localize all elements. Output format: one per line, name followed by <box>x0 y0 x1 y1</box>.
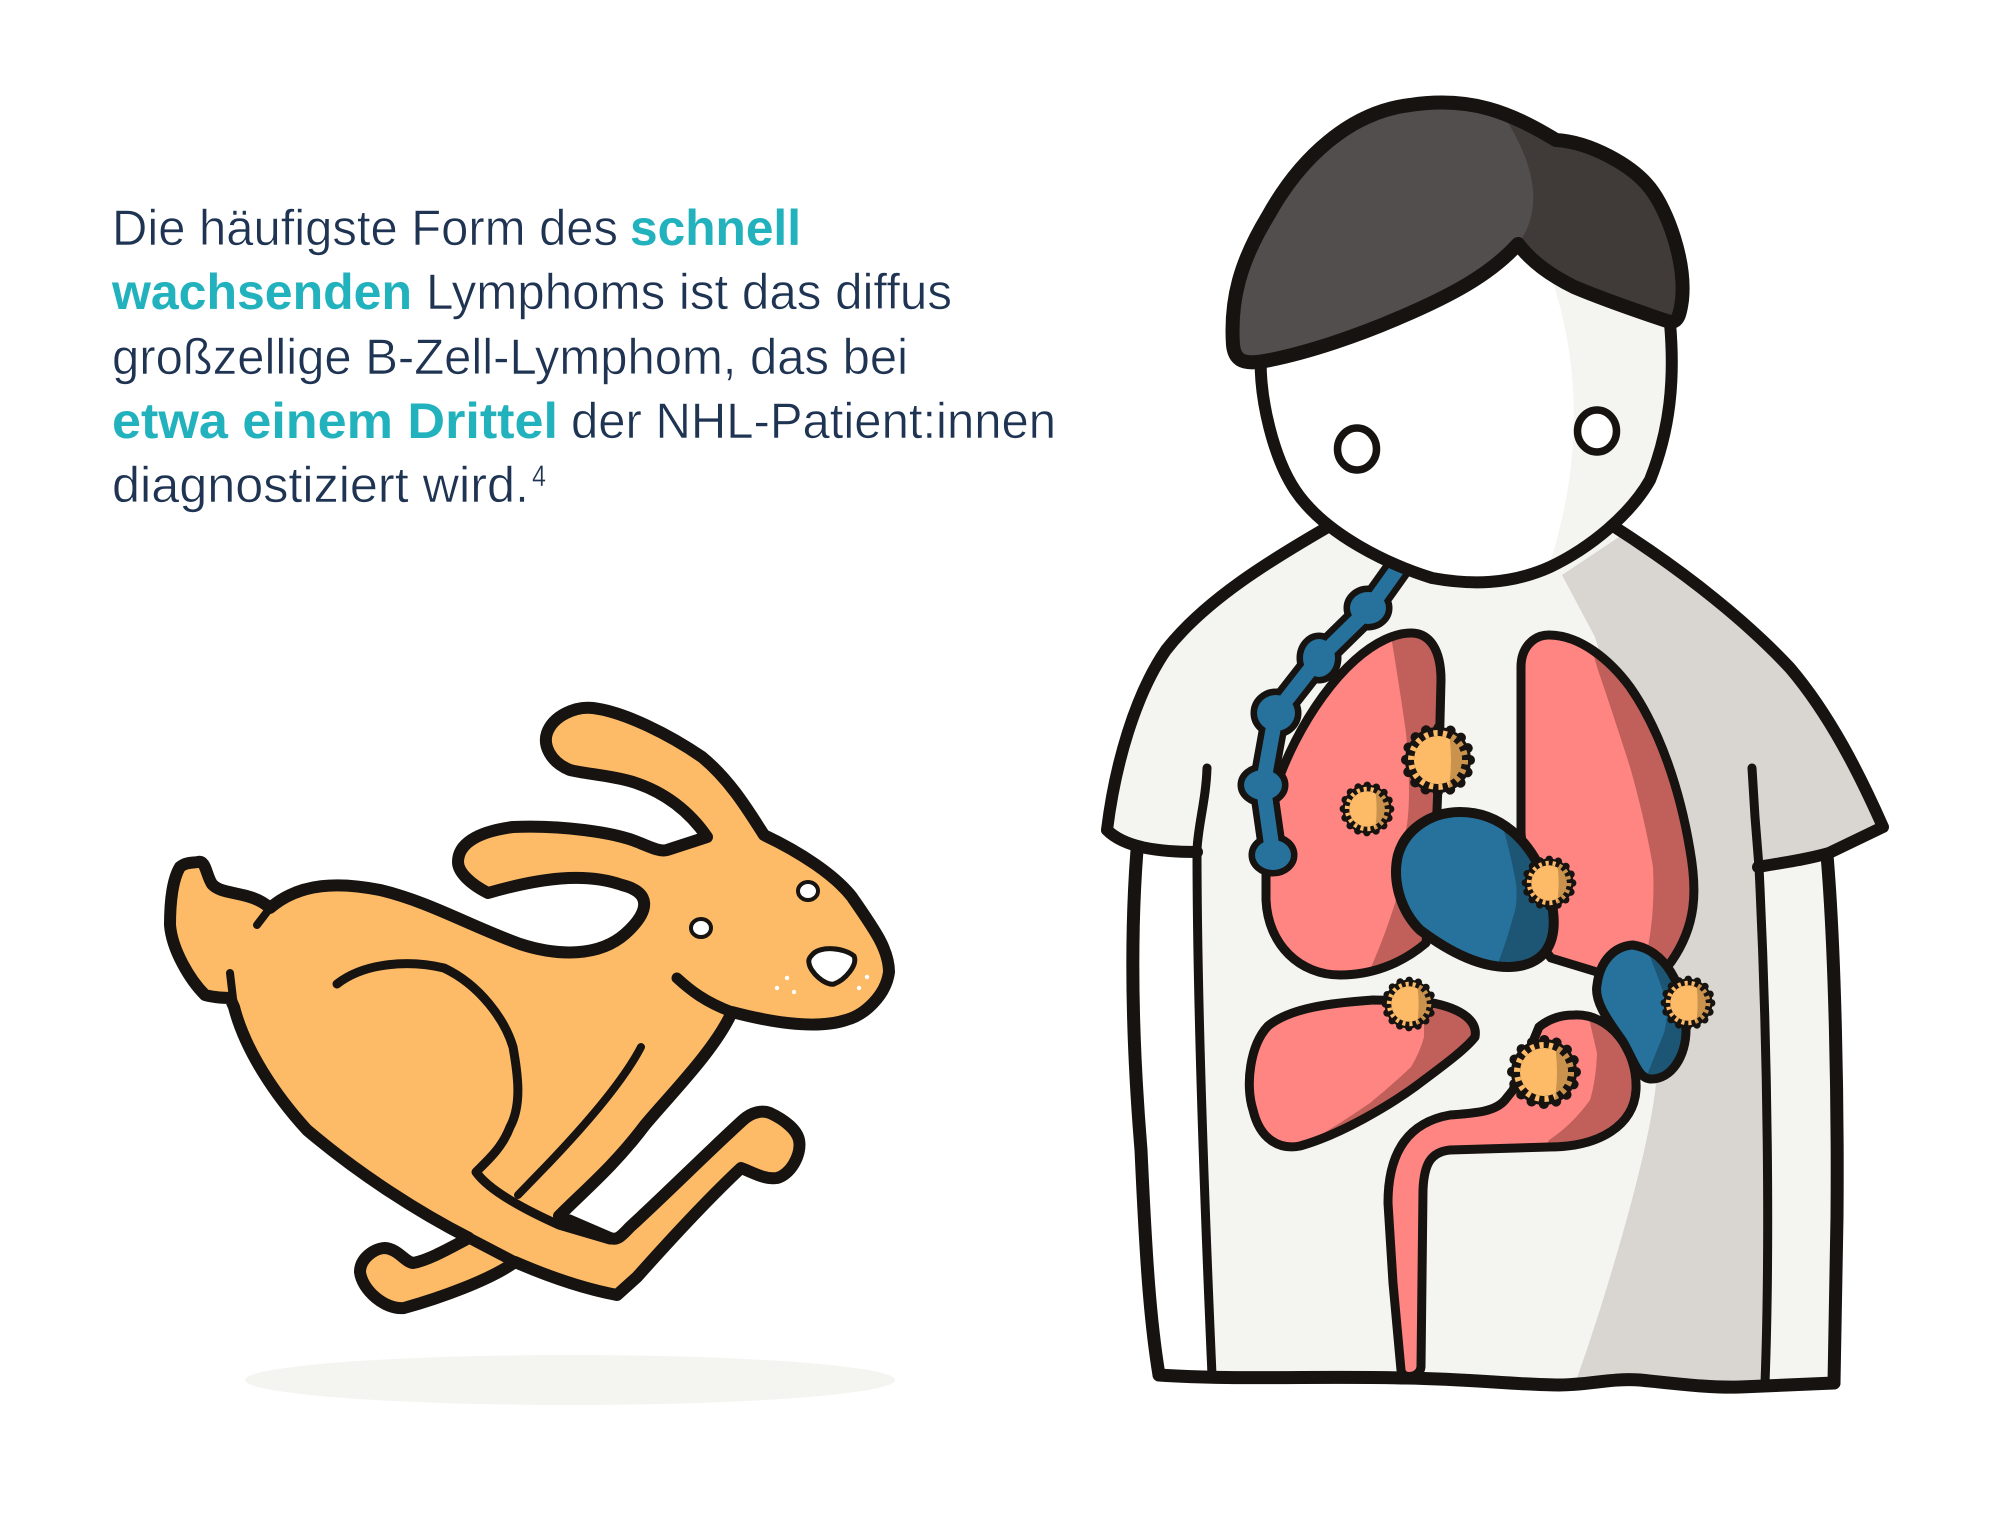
kidney-shaped blue organ <box>1597 940 1695 1085</box>
rabbit body outline <box>170 708 889 1308</box>
infographic canvas <box>112 96 1889 1405</box>
tumour large on left lung <box>1405 727 1471 793</box>
text block: lymphoma description: schnell <box>630 200 801 256</box>
left arm outline <box>1133 850 1159 1375</box>
rabbit nose <box>809 949 855 984</box>
chain outline <box>1238 568 1398 876</box>
tumour on heart organ <box>1525 859 1573 907</box>
right arm outline <box>1827 855 1837 1383</box>
rabbit illustration <box>170 708 889 1308</box>
left shoulder and sleeve outline <box>1107 520 1340 852</box>
text block: lymphoma description: Lymphoms ist das diffus <box>426 264 952 320</box>
rabbit tail crease <box>230 908 270 1007</box>
tumour on kidney organ <box>1664 979 1712 1027</box>
shirt outline <box>1107 520 1883 1387</box>
right shoulder and sleeve outline <box>1610 524 1883 867</box>
tumour on liver <box>1385 980 1433 1028</box>
lymph node chain <box>1238 568 1398 876</box>
right inner seam <box>1752 768 1768 1383</box>
text block: lymphoma description: der NHL-Patient:innen <box>571 393 1056 449</box>
text block: lymphoma description: etwa einem Drittel <box>112 393 558 449</box>
shirt shadow side <box>1562 533 1883 1388</box>
stomach and duct <box>1388 1010 1645 1376</box>
text block: lymphoma description: wachsenden <box>111 264 412 320</box>
text block: lymphoma description: 4 <box>532 460 546 493</box>
left lung <box>1266 630 1450 980</box>
shirt torso and sleeves fill <box>1107 529 1883 1388</box>
rabbit whisker dots <box>775 975 869 994</box>
rabbit foreleg line <box>518 1047 641 1195</box>
shirt hem <box>1159 1375 1834 1387</box>
text block: lymphoma description: Die häufigste Form des <box>112 200 618 256</box>
rabbit lower eye <box>691 919 711 937</box>
liver <box>1249 995 1485 1160</box>
rabbit mouth <box>677 978 732 1012</box>
left eye <box>1338 428 1376 470</box>
right arm fill <box>1760 853 1837 1385</box>
right eye <box>1578 410 1616 452</box>
chain blue fill <box>1244 568 1398 870</box>
text block: lymphoma description: diagnostiziert wird. <box>112 457 529 513</box>
face <box>1254 284 1678 588</box>
tumour large on stomach <box>1511 1039 1577 1105</box>
right lung <box>1521 630 1700 1005</box>
heart-shaped blue organ <box>1396 810 1565 975</box>
ground shadow under rabbit <box>245 1355 895 1405</box>
rabbit belly line crossing hind leg <box>469 1238 515 1262</box>
text block: lymphoma description: großzellige B-Zell-Lymphom, das bei <box>112 329 908 385</box>
text block: lymphoma description <box>111 200 1056 513</box>
person illustration <box>1107 100 1883 1388</box>
rabbit haunch line <box>337 964 610 1240</box>
tumour small on left lung <box>1343 785 1391 833</box>
rabbit upper eye <box>798 882 818 900</box>
left inner seam <box>1197 768 1212 1375</box>
hair <box>1232 100 1700 362</box>
